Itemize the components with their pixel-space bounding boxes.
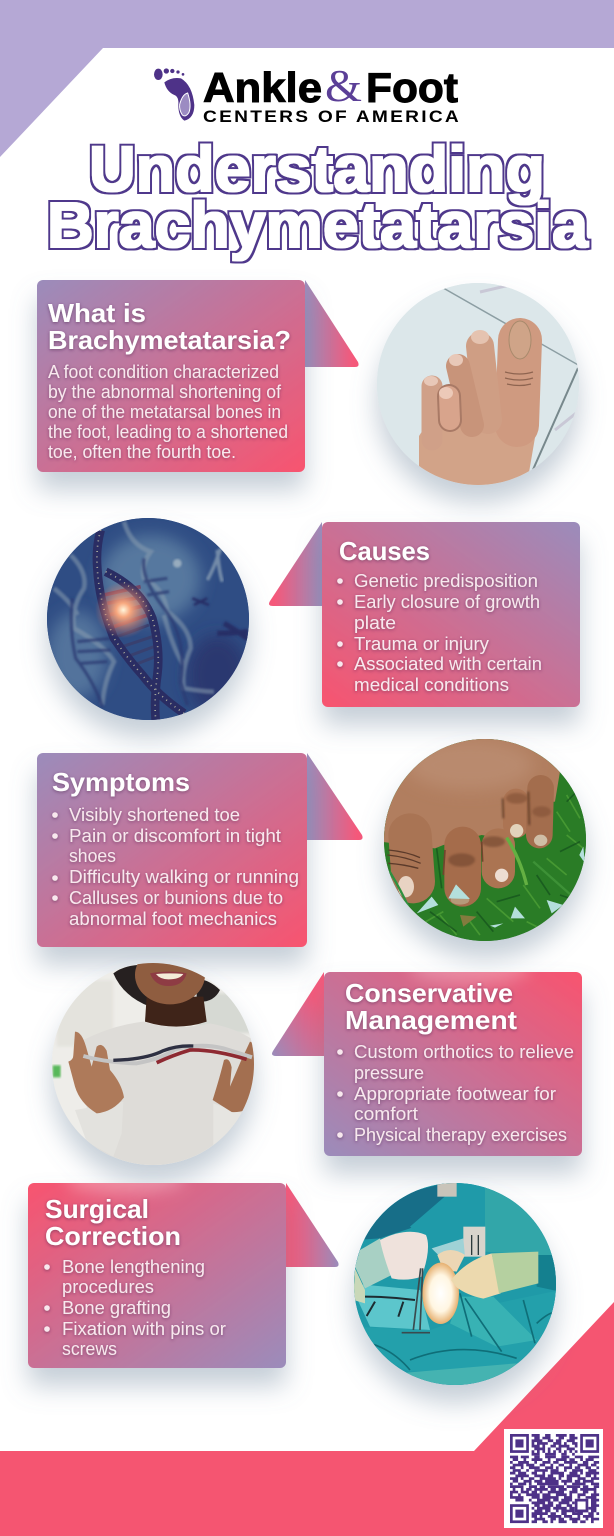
heading line 2: Brachymetatarsia?	[48, 325, 291, 355]
callout tail	[269, 522, 322, 606]
description: one of the metatarsal bones in	[48, 402, 281, 422]
top banner	[0, 0, 614, 157]
heading: Causes	[339, 536, 430, 566]
QR modules	[510, 1435, 599, 1522]
card text	[44, 1194, 226, 1359]
description: toe, often the fourth toe.	[48, 442, 236, 462]
QR background	[504, 1429, 603, 1528]
bullet list: pressure	[354, 1063, 424, 1083]
image: woman holding orthotic insole	[50, 946, 260, 1170]
bullet list: Physical therapy exercises	[354, 1125, 567, 1145]
heading line 2: Correction	[45, 1221, 181, 1251]
QR code	[504, 1429, 603, 1528]
bullet list: Custom orthotics to relieve	[354, 1042, 574, 1062]
bullet list: Calluses or bunions due to	[69, 888, 283, 908]
card sheen	[410, 972, 531, 990]
callout tail	[305, 280, 359, 367]
description: A foot condition characterized	[48, 362, 279, 382]
bullet list: Bone lengthening	[62, 1257, 205, 1277]
description: by the abnormal shortening of	[48, 382, 282, 402]
card sheen	[64, 1183, 186, 1200]
bullet list: Visibly shortened toe	[69, 805, 240, 825]
bullet list: Genetic predisposition	[354, 571, 538, 591]
bullet list: Pain or discomfort in tight	[69, 826, 281, 846]
logo subtitle: CENTERS OF AMERICA	[203, 107, 461, 126]
heading: Conservative	[345, 978, 513, 1008]
bullet list: Trauma or injury	[354, 634, 489, 654]
logo	[154, 60, 461, 126]
image: DNA helix	[44, 515, 254, 725]
bullet list	[44, 1257, 226, 1359]
bullet list: Bone grafting	[62, 1298, 171, 1318]
panel: surgical correction	[28, 1166, 339, 1368]
callout tail	[307, 753, 363, 840]
bullet list: comfort	[354, 1104, 418, 1124]
heading: What is	[48, 298, 146, 328]
callout tail	[286, 1183, 339, 1267]
heading line 2: Management	[345, 1005, 517, 1035]
icon: footprint	[154, 68, 194, 121]
bottom banner	[0, 1302, 614, 1536]
description	[48, 362, 288, 462]
description: the foot, leading to a shortened	[48, 422, 288, 442]
bullet list: Early closure of growth	[354, 592, 540, 612]
image: surgical team operating on foot	[350, 1180, 560, 1390]
heading: Surgical	[45, 1194, 149, 1224]
bullet list: Associated with certain	[354, 654, 542, 674]
callout tail	[272, 972, 324, 1056]
card background	[37, 280, 305, 472]
logo wordmark: Ankle: Ankle	[203, 64, 322, 111]
card text	[52, 767, 299, 929]
title line 1: Understanding	[89, 133, 545, 205]
card background	[28, 1183, 286, 1368]
title	[47, 133, 588, 261]
card text	[337, 978, 574, 1145]
card text	[337, 536, 542, 695]
bullet list	[337, 1042, 574, 1145]
bullet list: Fixation with pins or	[62, 1319, 226, 1339]
bullet list	[337, 571, 542, 695]
panel: what is brachymetatarsia	[37, 280, 359, 472]
title line 2: Brachymetatarsia	[47, 189, 588, 261]
image: toes on tile floor	[370, 280, 585, 490]
logo wordmark: Foot: Foot	[366, 64, 458, 111]
bullet list: procedures	[62, 1277, 154, 1297]
bullet list	[52, 805, 299, 929]
bullet list: Difficulty walking or running	[69, 867, 299, 887]
panel: conservative management	[272, 952, 582, 1156]
card text	[48, 298, 291, 462]
panel: symptoms	[37, 753, 363, 947]
bullet list: abnormal foot mechanics	[69, 909, 277, 929]
card background	[324, 972, 582, 1156]
heading: Symptoms	[52, 767, 190, 797]
bullet list: screws	[62, 1339, 117, 1359]
bullet list: plate	[354, 613, 396, 633]
bullet list: Appropriate footwear for	[354, 1084, 556, 1104]
card background	[322, 522, 580, 707]
card background	[37, 753, 307, 947]
bullet list: medical conditions	[354, 675, 509, 695]
image: toes in grass	[380, 735, 590, 945]
panel: causes	[269, 522, 580, 707]
bullet list: shoes	[69, 846, 116, 866]
logo ampersand: &	[325, 60, 362, 111]
